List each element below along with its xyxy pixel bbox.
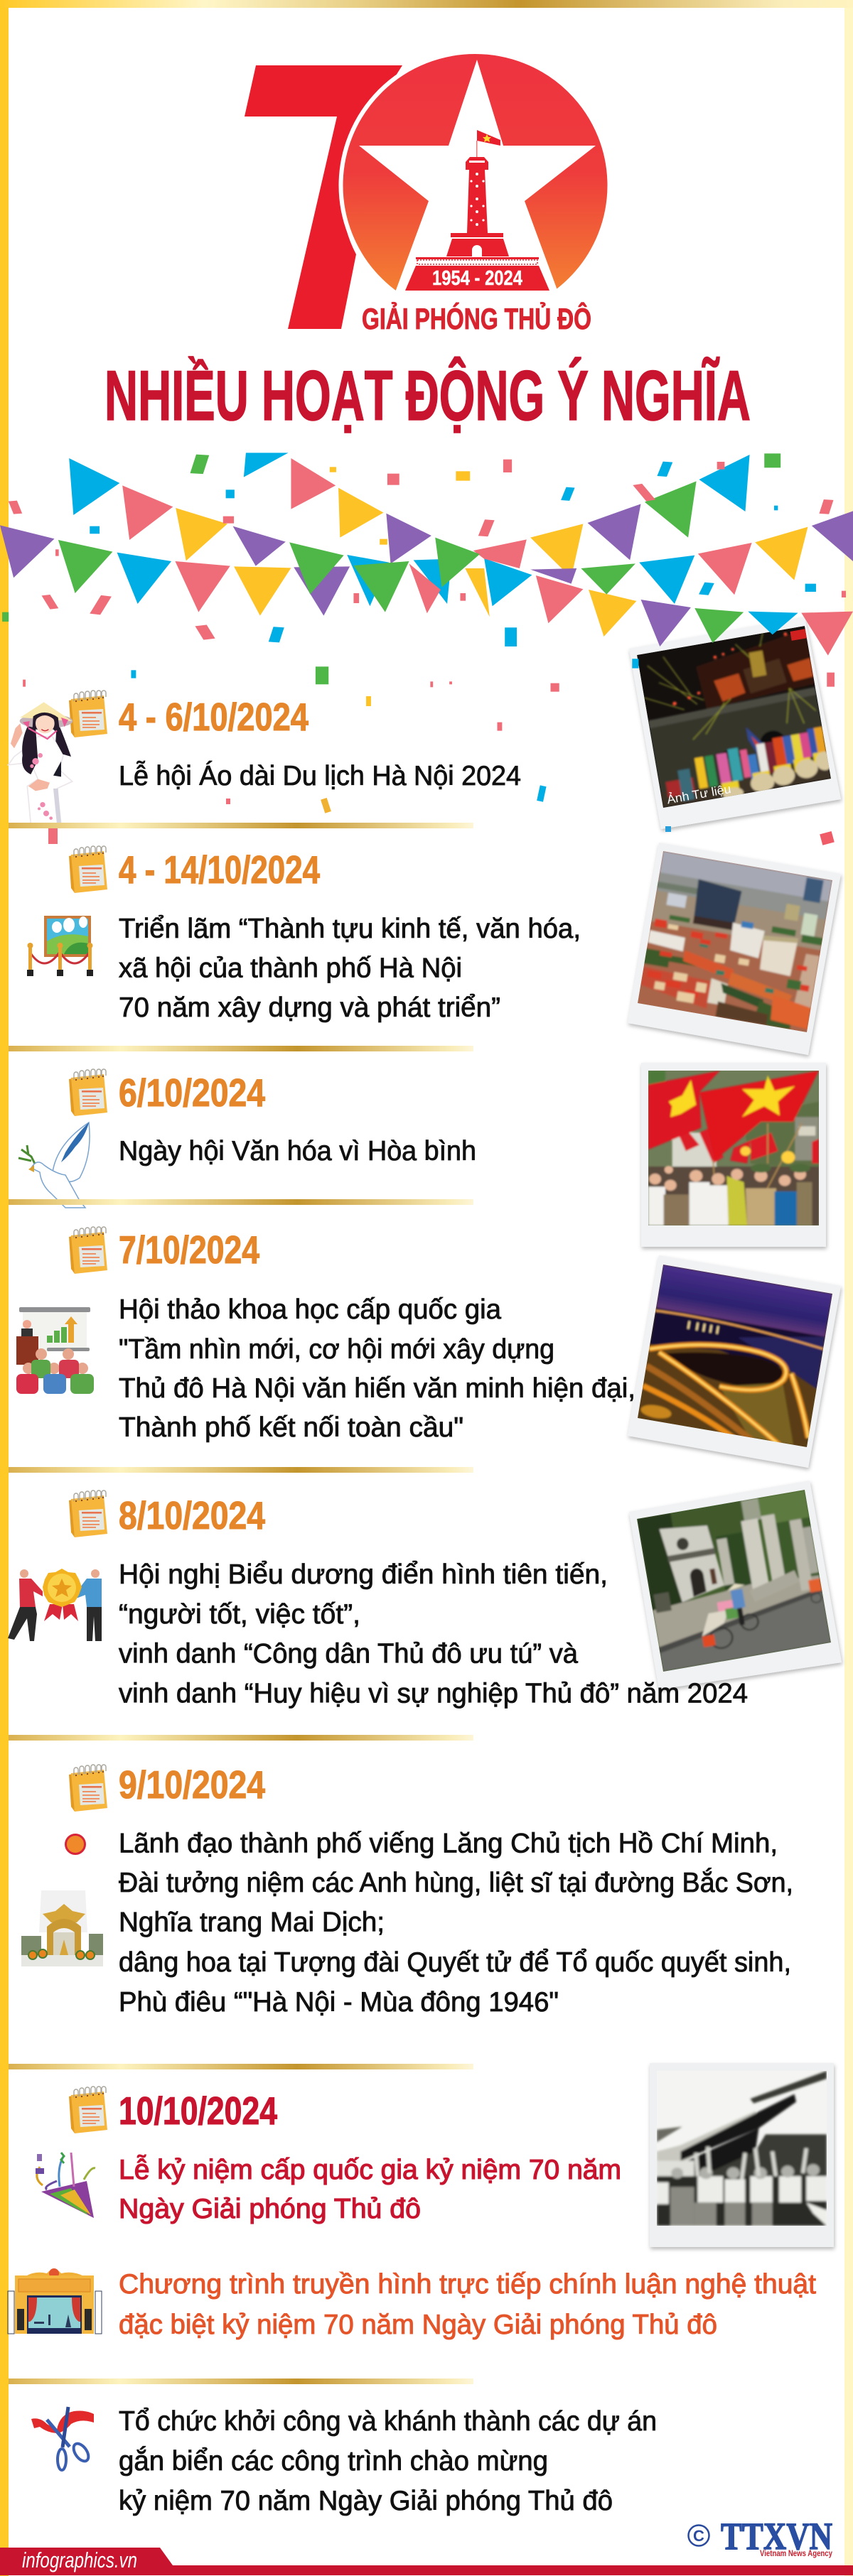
description bbox=[119, 914, 581, 1023]
icon: exhibition painting bbox=[27, 916, 93, 976]
description: kỷ niệm 70 năm Ngày Giải phóng Thủ đô bbox=[119, 2486, 613, 2516]
copyright mark bbox=[688, 2525, 709, 2546]
Hanoi flag tower bbox=[405, 130, 549, 291]
item 4: national scientific conference bbox=[16, 1227, 635, 1443]
icon: woman in ao dai bbox=[9, 702, 73, 824]
website: infographics.vn bbox=[22, 2548, 137, 2572]
logo: 70 years liberation of the capital bbox=[245, 52, 610, 335]
description: Ngày hội Văn hóa vì Hòa bình bbox=[119, 1136, 476, 1167]
divider 4 bbox=[9, 1467, 473, 1473]
description: vinh danh “Huy hiệu vì sự nghiệp Thủ đô” năm 2024 bbox=[119, 1678, 748, 1709]
date: 6/10/2024 bbox=[119, 1071, 265, 1115]
icon: party popper bbox=[36, 2153, 95, 2218]
red description: Lễ kỷ niệm cấp quốc gia kỷ niệm 70 năm bbox=[119, 2155, 621, 2185]
description: 70 năm xây dựng và phát triển” bbox=[119, 992, 500, 1023]
divider 7 bbox=[9, 2379, 473, 2384]
numeral 7 bbox=[245, 65, 402, 329]
description: Đài tưởng niệm các Anh hùng, liệt sĩ tại đường Bắc Sơn, bbox=[119, 1868, 793, 1898]
description: Thủ đô Hà Nội văn hiến văn minh hiện đại, bbox=[119, 1373, 635, 1404]
date: 9/10/2024 bbox=[119, 1763, 265, 1807]
description: Triển lãm “Thành tựu kinh tế, văn hóa, bbox=[119, 914, 581, 944]
item 2: exhibition bbox=[27, 846, 581, 1023]
agency tagline: Vietnam News Agency bbox=[760, 2548, 832, 2558]
item 5: exemplary conference bbox=[8, 1490, 748, 1709]
orange description: Chương trình truyền hình trực tiếp chính luận nghệ thuật bbox=[119, 2269, 816, 2300]
divider 5 bbox=[9, 1735, 473, 1741]
photo 5: Quan Chuong gate with cyclo bbox=[629, 1481, 842, 1689]
icon: scissors and ribbon bbox=[31, 2407, 94, 2470]
footer bbox=[0, 2548, 853, 2575]
photo 1: Ao dai festival at the citadel bbox=[629, 617, 841, 829]
description: Nghĩa trang Mai Dịch; bbox=[119, 1907, 385, 1938]
description: xã hội của thành phố Hà Nội bbox=[119, 953, 462, 983]
photo 2: Hanoi cityscape bbox=[628, 843, 841, 1055]
icon: calendar bbox=[69, 1227, 107, 1274]
photo 4: night interchange bbox=[628, 1255, 841, 1468]
description: Thành phố kết nối toàn cầu" bbox=[119, 1412, 463, 1443]
description: Lãnh đạo thành phố viếng Lăng Chủ tịch Hồ Chí Minh, bbox=[119, 1829, 778, 1858]
date: 8/10/2024 bbox=[119, 1493, 265, 1537]
icon: peace dove bbox=[18, 1122, 90, 1208]
item 6: wreath laying bbox=[21, 1763, 793, 2018]
divider 1 bbox=[9, 823, 473, 828]
icon: award ceremony bbox=[8, 1569, 102, 1641]
item 3: culture for peace day bbox=[18, 1069, 476, 1208]
description: gắn biển các công trình chào mừng bbox=[119, 2446, 548, 2477]
description: Tổ chức khởi công và khánh thành các dự án bbox=[119, 2406, 657, 2437]
description: "Tầm nhìn mới, cơ hội mới xây dựng bbox=[119, 1334, 554, 1365]
photo credit: Ảnh Tư liệu bbox=[666, 781, 732, 806]
icon: calendar bbox=[69, 1765, 107, 1812]
divider 6 bbox=[9, 2064, 473, 2069]
icon: calendar bbox=[69, 1490, 107, 1537]
item 1: Ao dai festival bbox=[9, 691, 521, 824]
bullet dot bbox=[65, 1834, 85, 1854]
confetti bbox=[2, 453, 846, 868]
description: Hội thảo khoa học cấp quốc gia bbox=[119, 1294, 501, 1325]
item 7: national ceremony bbox=[8, 2087, 816, 2340]
divider 3 bbox=[9, 1199, 473, 1205]
logo caption: GIẢI PHÓNG THỦ ĐÔ bbox=[362, 301, 591, 335]
date: 4 - 14/10/2024 bbox=[119, 848, 320, 892]
orange description bbox=[119, 2269, 816, 2340]
description bbox=[119, 2406, 657, 2516]
bunting flags bbox=[0, 453, 853, 656]
description: Lễ hội Áo dài Du lịch Hà Nội 2024 bbox=[119, 761, 521, 791]
item 8: groundbreaking projects bbox=[31, 2406, 657, 2516]
years text: 1954 - 2024 bbox=[432, 267, 522, 290]
description: Phù điêu “"Hà Nội - Mùa đông 1946" bbox=[119, 1987, 559, 2018]
photo 3: crowd with red flags bbox=[641, 1063, 826, 1247]
copyright mark: C bbox=[693, 2527, 704, 2545]
description bbox=[119, 1559, 748, 1709]
agency logo TTXVN bbox=[688, 2515, 832, 2558]
description: Hội nghị Biểu dương điển hình tiên tiến, bbox=[119, 1559, 608, 1590]
description: dâng hoa tại Tượng đài Quyết tử để Tổ quốc quyết sinh, bbox=[119, 1947, 791, 1978]
description: vinh danh “Công dân Thủ đô ưu tú” và bbox=[119, 1638, 578, 1669]
description bbox=[119, 1829, 793, 2018]
photo 7: black and white archive photo bbox=[650, 2063, 834, 2247]
icon: conference audience bbox=[16, 1307, 94, 1394]
icon: heroes memorial bbox=[21, 1890, 103, 1966]
icon: calendar bbox=[69, 2087, 107, 2133]
agency name: TTXVN bbox=[721, 2515, 832, 2558]
divider 2 bbox=[9, 1046, 473, 1051]
icon: calendar bbox=[69, 846, 107, 893]
description: “người tốt, việc tốt”, bbox=[119, 1599, 360, 1630]
date: 4 - 6/10/2024 bbox=[119, 695, 309, 739]
icon: TV stage bbox=[8, 2268, 102, 2334]
date: 7/10/2024 bbox=[119, 1228, 259, 1272]
numeral 0 circle with star bbox=[338, 54, 607, 291]
date: 10/10/2024 bbox=[119, 2089, 277, 2133]
red description: Ngày Giải phóng Thủ đô bbox=[119, 2194, 421, 2224]
icon: calendar bbox=[69, 1069, 107, 1116]
icon: calendar bbox=[69, 691, 107, 737]
red description bbox=[119, 2155, 621, 2224]
description bbox=[119, 1294, 635, 1443]
orange description: đặc biệt kỷ niệm 70 năm Ngày Giải phóng Thủ đô bbox=[119, 2310, 717, 2340]
